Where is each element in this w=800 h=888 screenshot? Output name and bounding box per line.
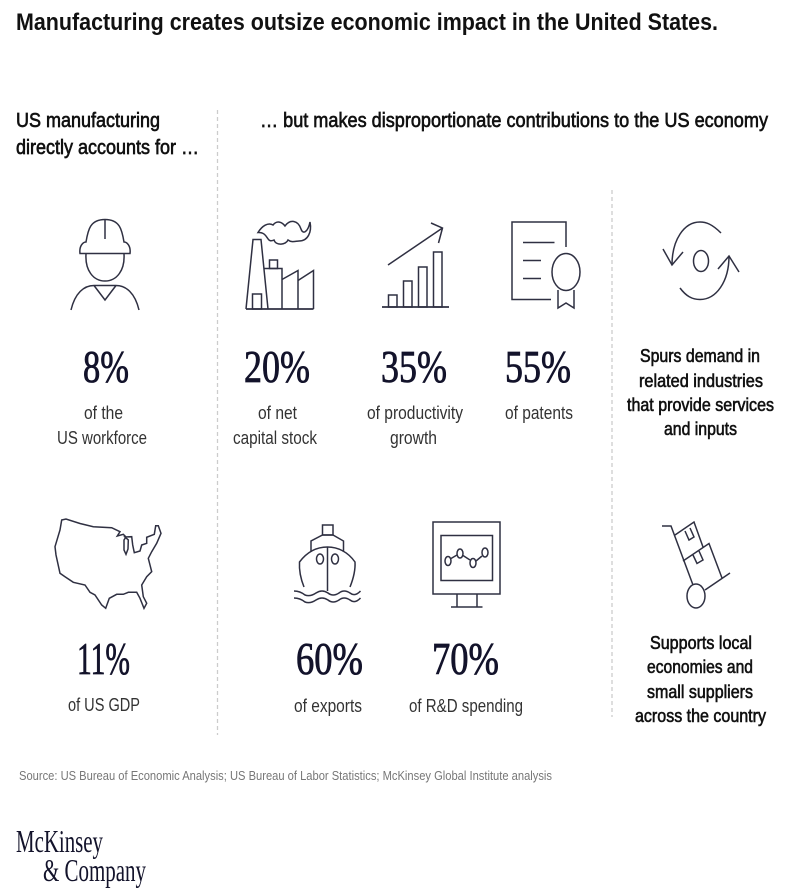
stat: 8% of the US workforce [57, 220, 147, 448]
stat: 8% of the US workforce: of the [84, 403, 123, 423]
heading: left column: directly accounts for … [16, 137, 199, 159]
icon: hand truck with boxes [662, 522, 730, 608]
stat: 55% of patents [505, 222, 580, 423]
stat: 8% of the US workforce: US workforce [57, 428, 147, 448]
stat: 35% of productivity growth: growth [390, 428, 437, 448]
stat: 60% of exports: of exports [294, 696, 362, 716]
stat: 60% of exports: 60% [296, 634, 363, 684]
logo: McKinsey & Company: McKinsey [16, 823, 103, 859]
icon: ship on waves [294, 525, 360, 603]
heading: left column: US manufacturing [16, 110, 160, 132]
stat: 20% of net capital stock: capital stock [233, 428, 318, 448]
callout: spurs demand: that provide services [627, 395, 774, 415]
stat: 60% of exports [294, 525, 363, 716]
icon: worker in hard hat [71, 220, 139, 310]
stat: 8% of the US workforce: 8% [83, 342, 129, 392]
icon: certificate with ribbon [512, 222, 580, 308]
logo: McKinsey & Company [16, 823, 146, 888]
callout: spurs demand: and inputs [664, 419, 737, 439]
stat: 11% of US GDP: of US GDP [68, 695, 140, 715]
logo: McKinsey & Company: & Company [43, 852, 146, 888]
stat: 20% of net capital stock: 20% [244, 342, 310, 392]
stat: 11% of US GDP [55, 519, 161, 715]
stat: 55% of patents: of patents [505, 403, 573, 423]
callout: supports local economies: small suppliers [647, 682, 753, 702]
heading: left column [16, 110, 199, 159]
callout: supports local economies [635, 522, 766, 726]
stat: 70% of R&D spending: 70% [432, 634, 499, 684]
callout: spurs demand [627, 222, 774, 439]
callout: supports local economies: Supports local [650, 633, 752, 653]
icon: factory [246, 221, 314, 309]
stat: 35% of productivity growth [367, 223, 463, 448]
stat: 55% of patents: 55% [505, 342, 571, 392]
callout: spurs demand: Spurs demand in [640, 346, 760, 366]
icon: map of the United States [55, 519, 161, 608]
stat: 35% of productivity growth: 35% [381, 342, 447, 392]
stat: 11% of US GDP: 11% [77, 634, 130, 684]
callout: supports local economies: across the country [635, 706, 766, 726]
stat: 20% of net capital stock: of net [258, 403, 297, 423]
icon: rising bar chart with arrow [382, 223, 449, 307]
title: Manufacturing creates outsize economic impact in the United States. [16, 9, 718, 36]
stat: 35% of productivity growth: of productivity [367, 403, 463, 423]
callout: supports local economies: economies and [647, 657, 753, 677]
stat: 20% of net capital stock [233, 221, 318, 448]
stat: 70% of R&D spending: of R&D spending [409, 696, 523, 716]
source note: Source: US Bureau of Economic Analysis; US Bureau of Labor Statistics; McKinsey Global Institute analysis [19, 768, 552, 783]
icon: monitor with line chart [433, 522, 500, 607]
stat: 70% of R&D spending [409, 522, 523, 716]
icon: circular arrows [663, 222, 739, 300]
callout: spurs demand: related industries [639, 371, 763, 391]
